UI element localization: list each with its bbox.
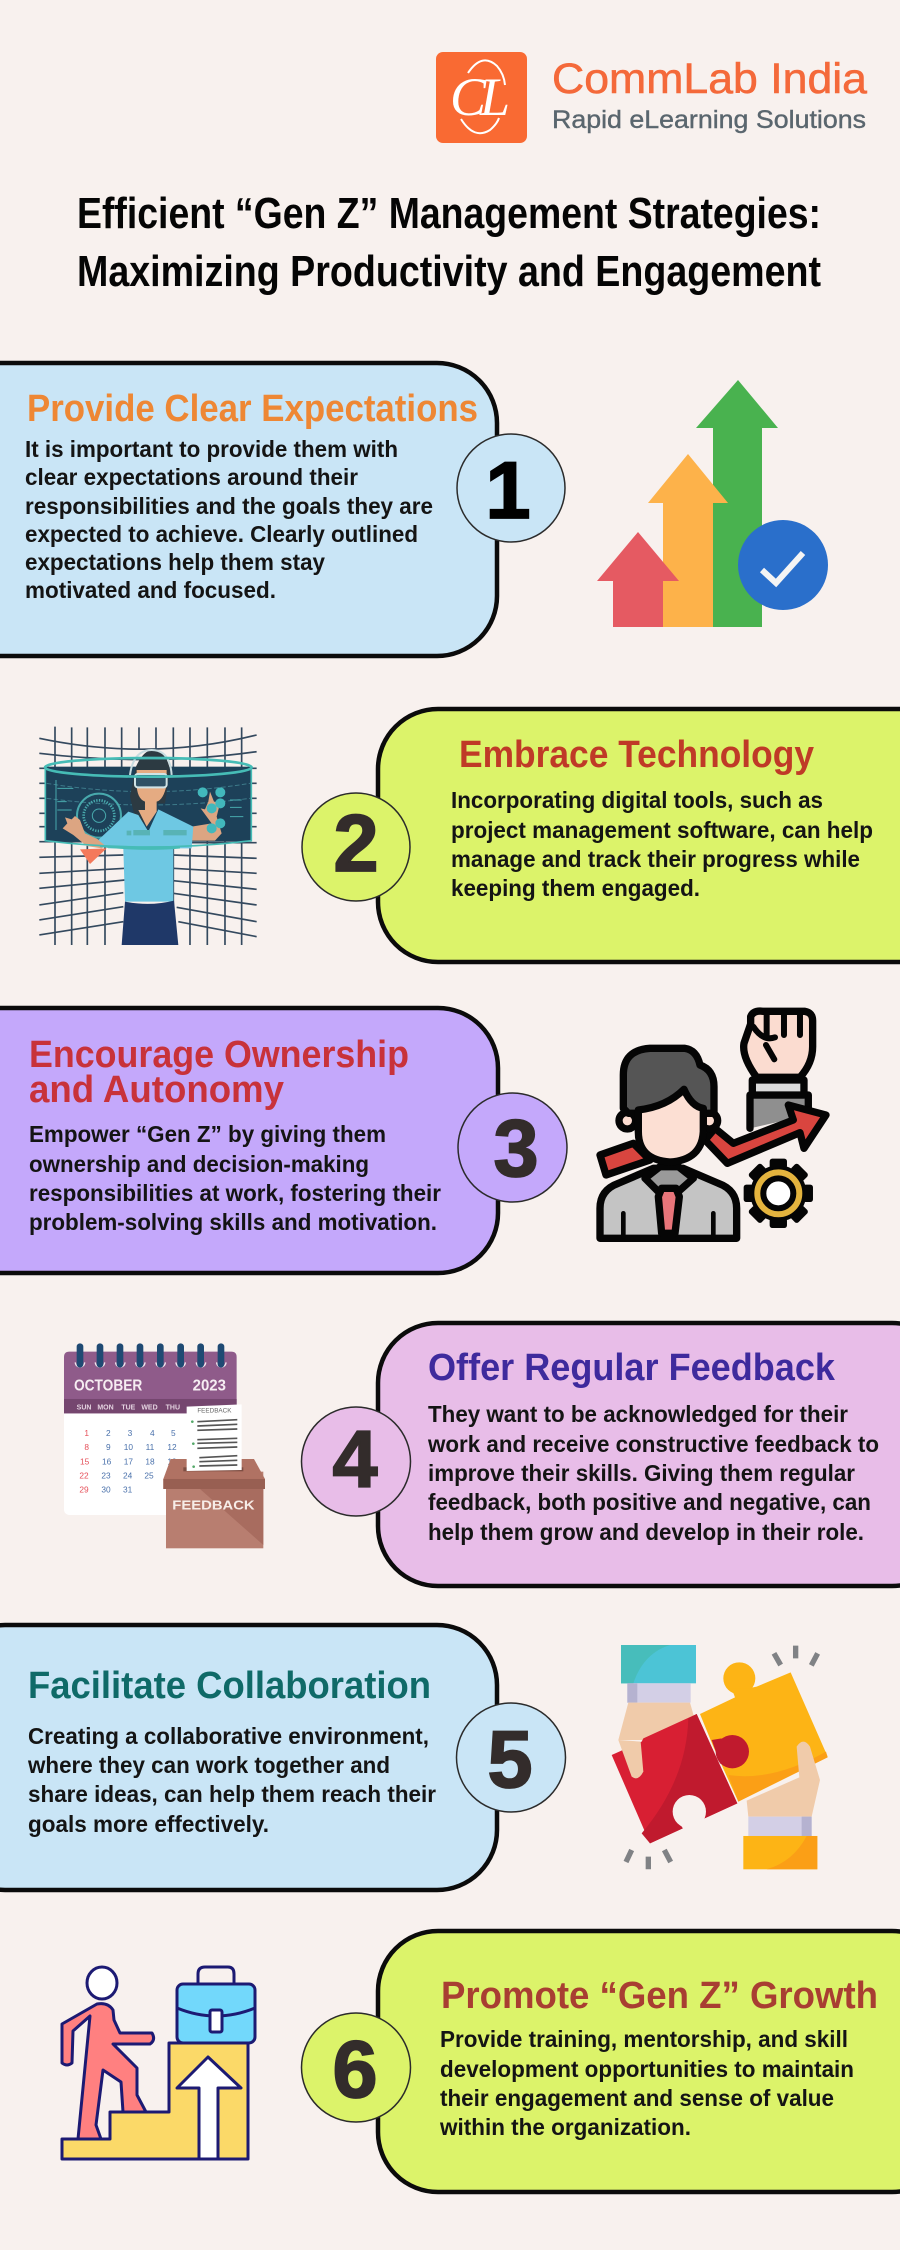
headset	[130, 750, 172, 775]
icon: October 2023 calendar and feedback box: 2023	[193, 1378, 226, 1395]
icon: figure climbing steps to a briefcase	[62, 1967, 255, 2159]
icon: October 2023 calendar and feedback box	[64, 1347, 265, 1548]
icon: October 2023 calendar and feedback box: 11	[146, 1442, 155, 1452]
heading 4: Offer Regular Feedback	[428, 1347, 836, 1389]
icon: October 2023 calendar and feedback box: 15	[80, 1456, 90, 1466]
heading 3: Encourage Ownership	[29, 1034, 409, 1076]
holographic panel edge	[45, 758, 252, 847]
body text 2: keeping them engaged.	[451, 875, 700, 901]
icon: October 2023 calendar and feedback box: 31	[123, 1485, 133, 1495]
number badge 5	[456, 1703, 566, 1812]
body text 1: clear expectations around their	[25, 464, 358, 490]
heading 3: and Autonomy	[29, 1069, 284, 1111]
icon: October 2023 calendar and feedback box: 24	[123, 1470, 133, 1480]
body text 3: responsibilities at work, fostering their	[29, 1180, 441, 1206]
hair	[130, 750, 170, 827]
logo: CommLab India: CommLab India	[552, 55, 867, 103]
icon: October 2023 calendar and feedback box: 1	[84, 1428, 89, 1438]
title	[77, 189, 821, 296]
icon: October 2023 calendar and feedback box: 10	[124, 1442, 133, 1452]
icon: October 2023 calendar and feedback box: 29	[79, 1485, 89, 1495]
icon: October 2023 calendar and feedback box: 25	[144, 1470, 154, 1480]
number badge 3: 3	[493, 1104, 539, 1194]
body text 2: manage and track their progress while	[451, 846, 860, 872]
body text 5: Creating a collaborative environment,	[28, 1723, 429, 1749]
face and neck	[137, 770, 167, 827]
panel 6: Promote "Gen Z" Growth	[302, 1931, 900, 2192]
icon: October 2023 calendar and feedback box: OCTOBER	[74, 1378, 142, 1395]
panel 2: Embrace Technology	[302, 709, 900, 962]
body text 5: where they can work together and	[27, 1752, 390, 1778]
body text 1: expectations help them stay	[25, 549, 325, 575]
panel 1: Provide Clear Expectations	[0, 363, 565, 656]
body text 3: Empower “Gen Z” by giving them	[29, 1121, 386, 1147]
icon: person in VR headset with holographic screen	[39, 727, 257, 945]
icon: October 2023 calendar and feedback box: SUN	[77, 1404, 91, 1411]
icon: October 2023 calendar and feedback box: FEEDBACK	[197, 1407, 232, 1414]
heading 3	[29, 1034, 409, 1111]
number badge 4: 4	[332, 1415, 378, 1505]
icon: October 2023 calendar and feedback box: 23	[101, 1470, 111, 1480]
icon: October 2023 calendar and feedback box: FEEDBACK	[172, 1497, 255, 1512]
icon: October 2023 calendar and feedback box: 5	[171, 1428, 176, 1438]
heading 5: Facilitate Collaboration	[28, 1665, 431, 1707]
body text 6	[439, 2026, 854, 2140]
panel 5: Facilitate Collaboration	[0, 1625, 566, 1890]
icon: October 2023 calendar and feedback box: 16	[102, 1456, 112, 1466]
number badge 6	[302, 2013, 410, 2122]
body text 2	[451, 787, 873, 901]
body text 6: their engagement and sense of value	[440, 2085, 834, 2111]
number badge 1: 1	[485, 446, 531, 536]
heading 1: Provide Clear Expectations	[27, 388, 478, 430]
body text 6: development opportunities to maintain	[440, 2056, 854, 2082]
panel 3: Encourage Ownership and Autonomy	[0, 1008, 567, 1273]
icon: October 2023 calendar and feedback box: 19	[167, 1456, 177, 1466]
body text 2: Incorporating digital tools, such as	[451, 787, 823, 813]
heading 6: Promote “Gen Z” Growth	[441, 1975, 878, 2017]
icon: October 2023 calendar and feedback box: 17	[124, 1456, 133, 1466]
number badge 3	[458, 1093, 567, 1202]
body text 1: responsibilities and the goals they are	[25, 493, 433, 519]
icon: October 2023 calendar and feedback box: 18	[145, 1456, 155, 1466]
trousers	[122, 901, 178, 945]
icon: October 2023 calendar and feedback box: 8	[84, 1442, 89, 1452]
icon: growth arrows with check	[597, 380, 828, 627]
icon: October 2023 calendar and feedback box: 9	[106, 1442, 111, 1452]
body text 4: work and receive constructive feedback to	[427, 1431, 879, 1457]
body text 5: share ideas, can help them reach their	[28, 1781, 436, 1807]
number badge 4	[302, 1407, 410, 1516]
body text 1: motivated and focused.	[25, 577, 276, 603]
body text 4	[427, 1401, 879, 1545]
number badge 2: 2	[333, 799, 379, 889]
body text 1: It is important to provide them with	[25, 436, 398, 462]
number badge 1	[457, 434, 565, 542]
body text 3: ownership and decision-making	[29, 1151, 369, 1177]
icon: October 2023 calendar and feedback box: 12	[167, 1442, 177, 1452]
body text 1: expected to achieve. Clearly outlined	[25, 521, 418, 547]
body text 4: help them grow and develop in their role.	[428, 1519, 864, 1545]
logo: CommLab India: Rapid eLearning Solutions	[552, 106, 866, 134]
logo: CommLab India: C	[450, 67, 487, 127]
body text 6: Provide training, mentorship, and skill	[440, 2026, 848, 2052]
body text 4: improve their skills. Giving them regular	[428, 1460, 855, 1486]
arms and hands	[63, 792, 222, 848]
panel 4: Offer Regular Feedback	[302, 1323, 900, 1586]
icon: manager with raised fist, arrow and gear	[600, 1011, 826, 1238]
body text 4: feedback, both positive and negative, can	[428, 1489, 871, 1515]
heading 2: Embrace Technology	[459, 734, 814, 776]
icon: October 2023 calendar and feedback box: 4	[150, 1428, 155, 1438]
icon: two hands joining puzzle pieces	[612, 1645, 828, 1869]
logo: CommLab India: L	[479, 67, 510, 127]
icon: October 2023 calendar and feedback box: 3	[128, 1428, 133, 1438]
icon: October 2023 calendar and feedback box: WED	[141, 1404, 158, 1411]
icon: October 2023 calendar and feedback box: TUE	[121, 1404, 136, 1411]
icon: October 2023 calendar and feedback box: 30	[101, 1485, 111, 1495]
body text 3	[29, 1121, 441, 1235]
number badge 6: 6	[332, 2025, 378, 2115]
number badge 5: 5	[487, 1715, 533, 1805]
body text 6: within the organization.	[439, 2114, 691, 2140]
logo: CommLab India	[436, 52, 867, 143]
icon: October 2023 calendar and feedback box: 2	[106, 1428, 111, 1438]
body text 5: goals more effectively.	[28, 1811, 269, 1837]
shirt	[98, 809, 193, 902]
body text 1	[25, 436, 433, 603]
body text 3: problem-solving skills and motivation.	[29, 1209, 437, 1235]
icon: October 2023 calendar and feedback box: THU	[166, 1404, 180, 1411]
body text 2: project management software, can help	[451, 817, 873, 843]
icon: October 2023 calendar and feedback box: 22	[79, 1470, 89, 1480]
number badge 2	[302, 793, 410, 901]
body text 4: They want to be acknowledged for their	[428, 1401, 848, 1427]
icon: October 2023 calendar and feedback box: MON	[97, 1404, 114, 1411]
body text 5	[27, 1723, 436, 1837]
